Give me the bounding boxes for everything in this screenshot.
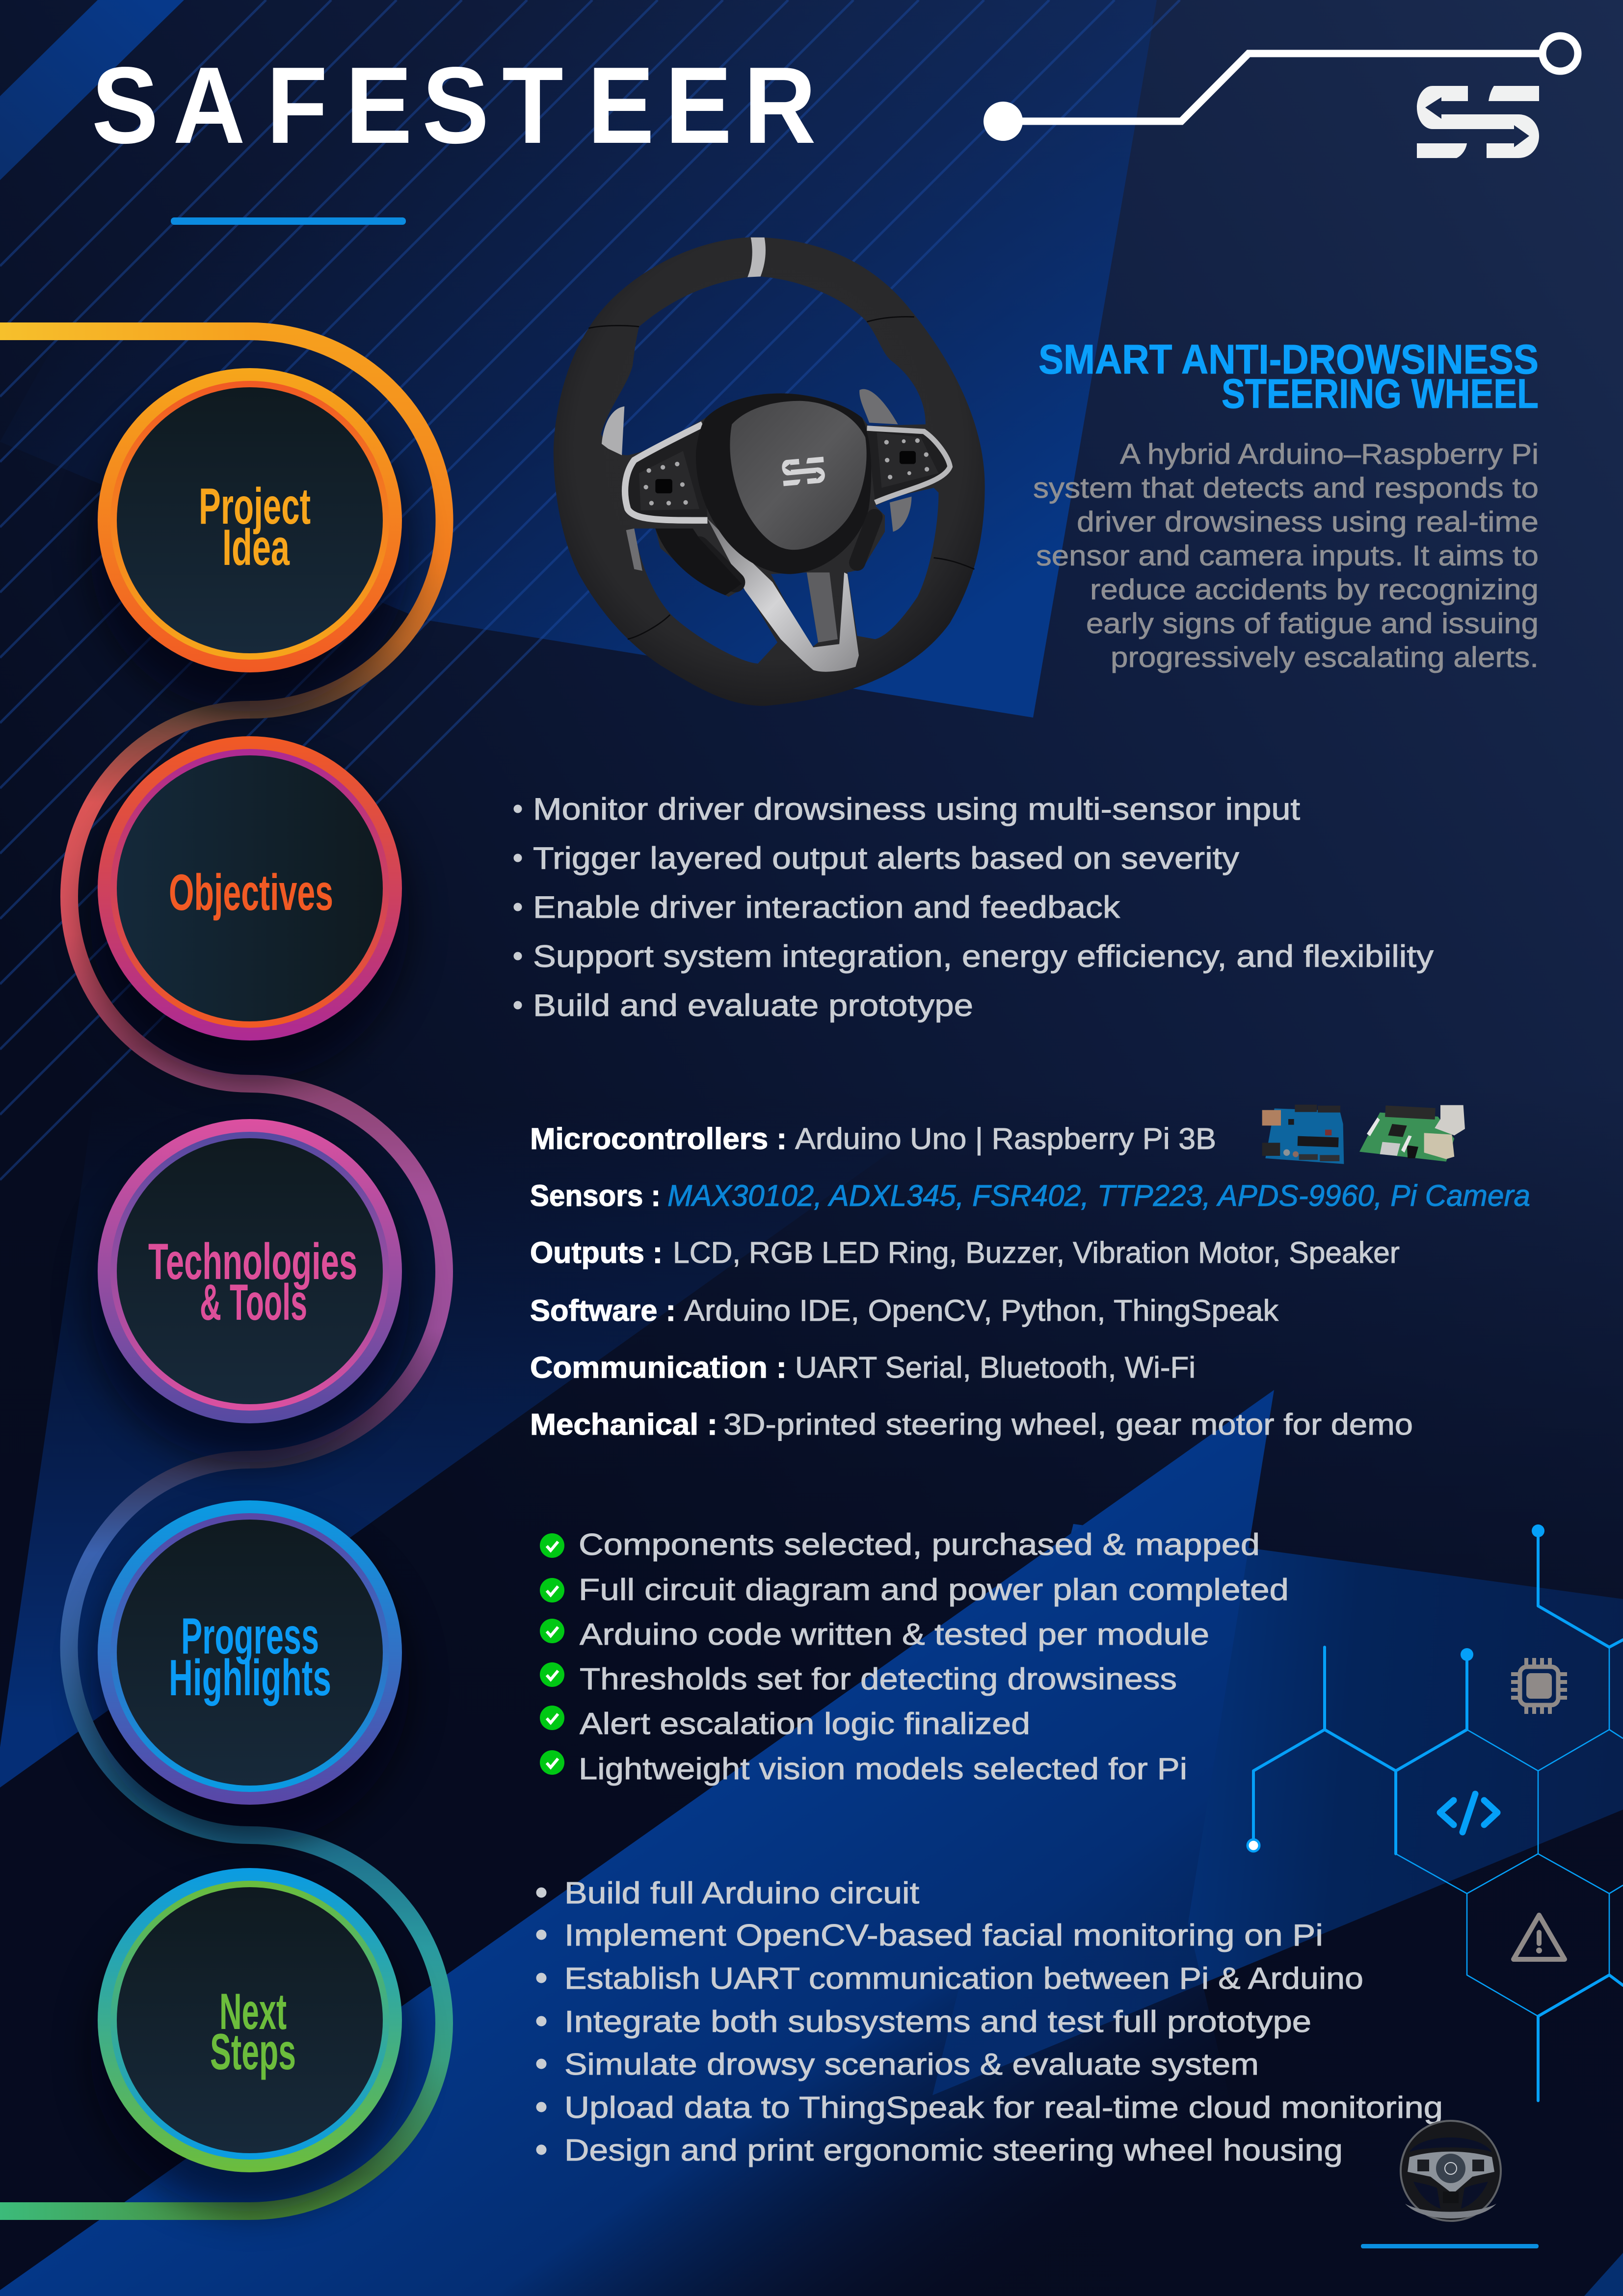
- icon: Raspberry Pi board: [1359, 1105, 1465, 1162]
- circuit line decoration: [984, 36, 1578, 141]
- icon: green check marks: [540, 1533, 564, 1775]
- small steering wheel image: [1401, 2121, 1501, 2221]
- panel: progress list: Full circuit diagram and power plan completed: [579, 1573, 1289, 1607]
- panel: next steps badge: Steps: [210, 2024, 296, 2081]
- panel: technologies list: Arduino Uno | Raspberry Pi 3B: [795, 1122, 1216, 1155]
- rim seams: [588, 317, 974, 639]
- title: SAFESTEER: [92, 45, 816, 166]
- panel: next steps list: Design and print ergonomic steering wheel housing: [564, 2134, 1343, 2167]
- panel: technologies badge: & Tools: [200, 1274, 307, 1331]
- panel: progress list: Components selected, purchased & mapped: [579, 1528, 1260, 1562]
- logo: SS arrows: [1417, 86, 1539, 158]
- panel: technologies list: UART Serial, Bluetooth, Wi-Fi: [795, 1351, 1196, 1384]
- footer bar: [1361, 2244, 1539, 2248]
- top silver marker: [747, 238, 766, 277]
- panel: technologies list: Software :: [530, 1294, 676, 1327]
- panel: technologies badge: Technologies: [148, 1233, 357, 1290]
- panel: technologies list: Arduino IDE, OpenCV, Python, ThingSpeak: [684, 1294, 1279, 1327]
- panel: next steps list: Implement OpenCV-based facial monitoring on Pi: [564, 1919, 1323, 1952]
- control buttons: [655, 451, 916, 493]
- icon: code brackets: [1440, 1794, 1497, 1832]
- icon: warning triangle: [1514, 1915, 1565, 1959]
- hexagon circuit graphic: [1248, 1524, 1623, 2101]
- panel: next steps list: Build full Arduino circuit: [564, 1876, 919, 1910]
- panel: next steps list: [536, 1876, 1443, 2167]
- panel: objectives badge: Objectives: [169, 864, 333, 921]
- panel: next steps list: Upload data to ThingSpeak for real-time cloud monitoring: [564, 2091, 1443, 2125]
- panel: technologies list: Communication :: [530, 1351, 787, 1384]
- panel: progress list: Thresholds set for detecting drowsiness: [580, 1662, 1177, 1696]
- panel: project idea badge: Idea: [222, 519, 290, 576]
- panel: progress list: Arduino code written & tested per module: [580, 1618, 1209, 1652]
- paragraph: reduce accidents by recognizing: [1090, 574, 1539, 606]
- panel: progress badge: Progress: [181, 1608, 319, 1665]
- airbag hub: [696, 393, 871, 574]
- panel: objectives badge: [90, 736, 409, 1080]
- paragraph: early signs of fatigue and issuing: [1086, 608, 1539, 640]
- paragraph: sensor and camera inputs. It aims to: [1036, 540, 1539, 572]
- heading: [1038, 336, 1539, 417]
- panel: progress badge: [90, 1500, 409, 1844]
- heading: SMART ANTI-DROWSINESS: [1038, 336, 1539, 382]
- paragraph: driver drowsiness using real-time: [1077, 506, 1539, 538]
- panel: next steps badge: [90, 1868, 409, 2212]
- panel: project idea badge: Project: [199, 478, 311, 535]
- panel: technologies badge: [90, 1119, 409, 1463]
- panel: progress list: Alert escalation logic finalized: [580, 1707, 1030, 1741]
- shift paddles: [602, 406, 624, 455]
- paragraph: A hybrid Arduino–Raspberry Pi: [1120, 438, 1539, 470]
- panel: technologies list: MAX30102, ADXL345, FSR402, TTP223, APDS-9960, Pi Camera: [667, 1179, 1530, 1212]
- serpentine ribbon: [0, 331, 445, 2211]
- panel: progress list: [540, 1528, 1289, 1786]
- left control bezel: [625, 425, 707, 520]
- paragraph: [1033, 438, 1539, 673]
- panel: objectives list: Support system integration, energy efficiency, and flexibility: [533, 939, 1434, 974]
- icon: chip: [1511, 1658, 1567, 1714]
- panel: objectives list: Trigger layered output alerts based on severity: [533, 841, 1240, 876]
- wheel rim and hub: [554, 237, 985, 706]
- panel: technologies list: Outputs :: [530, 1236, 663, 1269]
- panel: objectives list: Monitor driver drowsiness using multi-sensor input: [533, 792, 1301, 827]
- heading: STEERING WHEEL: [1222, 371, 1539, 417]
- title underline: [171, 217, 406, 225]
- panel: objectives list: [514, 792, 1434, 1023]
- panel: technologies list: LCD, RGB LED Ring, Buzzer, Vibration Motor, Speaker: [673, 1236, 1400, 1269]
- panel: objectives list: Enable driver interaction and feedback: [533, 890, 1120, 925]
- panel: technologies list: [530, 1122, 1530, 1441]
- panel: progress list: Lightweight vision models selected for Pi: [579, 1752, 1187, 1786]
- panel: technologies list: Microcontrollers :: [530, 1122, 787, 1155]
- icon: Arduino board: [1262, 1105, 1344, 1164]
- panel: next steps list: Integrate both subsystems and test full prototype: [564, 2005, 1311, 2039]
- silver spokes: [707, 519, 859, 672]
- panel: project description: [1033, 336, 1539, 673]
- steering wheel photo: [554, 237, 985, 706]
- lower pods: [699, 546, 735, 582]
- airbag logo: [781, 457, 825, 486]
- panel: technologies list: Mechanical :: [530, 1408, 718, 1441]
- panel: next steps badge: Next: [219, 1983, 287, 2040]
- panel: project idea badge: [90, 368, 409, 712]
- paragraph: system that detects and responds to: [1033, 472, 1539, 504]
- panel: next steps list: Simulate drowsy scenarios & evaluate system: [564, 2048, 1259, 2082]
- panel: technologies list: Sensors :: [530, 1179, 661, 1212]
- panel: progress badge: Highlights: [169, 1650, 331, 1707]
- panel: objectives list: Build and evaluate prototype: [533, 988, 973, 1023]
- panel: technologies list: 3D-printed steering wheel, gear motor for demo: [723, 1408, 1413, 1441]
- paragraph: progressively escalating alerts.: [1111, 641, 1539, 673]
- panel: next steps list: Establish UART communication between Pi & Arduino: [564, 1962, 1363, 1996]
- right control bezel: [867, 428, 950, 503]
